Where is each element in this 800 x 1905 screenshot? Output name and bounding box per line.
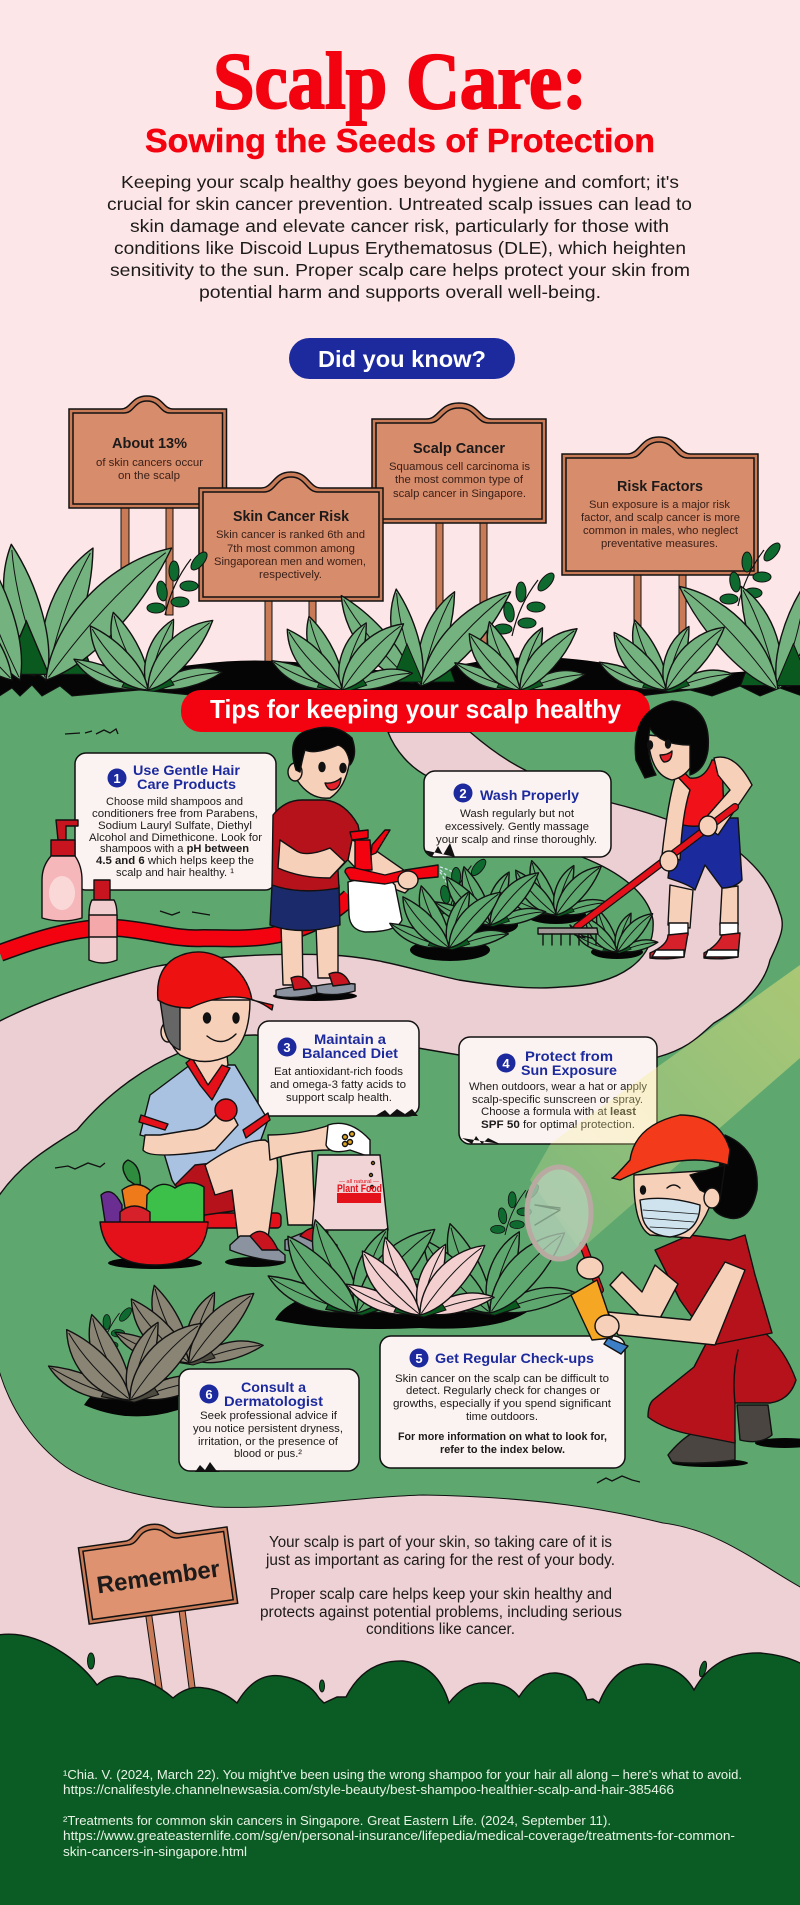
sign: about 13%: of skin cancers occur: [96, 457, 203, 469]
remember text: protects against potential problems, including serious: [260, 1604, 622, 1621]
tip 5 card: Skin cancer on the scalp can be difficult to: [395, 1373, 609, 1385]
tip 5 card: growths, especially if you spend significant: [393, 1398, 612, 1410]
sign: skin cancer risk: [199, 472, 383, 670]
remember sign: [77, 1514, 238, 1695]
lower pink ground: [0, 1340, 800, 1740]
sign: about 13%: [69, 396, 226, 615]
sign: scalp cancer: Squamous cell carcinoma is: [389, 461, 531, 473]
tip 3 card: [258, 1021, 419, 1116]
green lawn: [0, 685, 800, 1588]
character: boy watering: [270, 727, 438, 1001]
sign: skin cancer risk: Skin Cancer Risk: [233, 508, 350, 525]
remember text: conditions like cancer.: [366, 1621, 515, 1638]
tip 4 card: When outdoors, wear a hat or apply: [469, 1081, 647, 1093]
tip 4 card: Protect from: [525, 1048, 613, 1064]
tip 1 card: shampoos with a pH between: [100, 843, 249, 855]
tip 4 card: Sun Exposure: [521, 1062, 617, 1078]
tip 4 card: Choose a formula with at least: [481, 1106, 636, 1118]
sign: risk factors: common in males, who neglect: [583, 525, 738, 537]
tip 3 card: 3: [283, 1040, 291, 1055]
tip 1 card: conditioners free from Parabens,: [92, 808, 258, 820]
tip 2 card: 2: [459, 786, 467, 801]
did you know pill: [289, 338, 515, 379]
remember text: [260, 1534, 622, 1638]
sign: risk factors: preventative measures.: [601, 538, 718, 550]
tip 3 card: Balanced Diet: [302, 1045, 398, 1061]
garden plants row: [0, 528, 800, 700]
grey wilted plants: [44, 1281, 265, 1416]
tip 5 card: For more information on what to look for,: [398, 1431, 607, 1443]
character: older man planting seeds: — all natural —: [339, 1179, 379, 1185]
character: older man planting seeds: [139, 952, 388, 1267]
tip 4 card: scalp-specific sunscreen or spray.: [472, 1094, 643, 1106]
tip 3 card: Maintain a: [314, 1031, 386, 1047]
tip 5 card: [380, 1336, 625, 1468]
tip 3 card: and omega-3 fatty acids to: [270, 1079, 406, 1091]
grass tufts: [55, 729, 640, 1483]
intro paragraph: [107, 172, 692, 302]
tips heading pill: [181, 690, 650, 732]
tip 3 card: support scalp health.: [286, 1092, 392, 1104]
tip 4 card: SPF 50 for optimal protection.: [481, 1119, 635, 1131]
tip 1 card: 1: [113, 771, 121, 786]
sign: about 13%: About 13%: [112, 435, 187, 452]
tip 5 card: refer to the index below.: [440, 1444, 565, 1456]
soil band: [0, 657, 800, 702]
hedge footer: [0, 1634, 800, 1905]
intro paragraph: crucial for skin cancer prevention. Untreated scalp issues can lead to: [107, 194, 692, 214]
tip 4 card: [459, 1037, 657, 1144]
sign: skin cancer risk: Singaporean men and women,: [214, 556, 366, 568]
remember text: just as important as caring for the rest of your body.: [265, 1552, 615, 1569]
tip 6 card: you notice persistent dryness,: [193, 1423, 343, 1435]
water spray: [440, 867, 490, 925]
tip 6 card: [179, 1369, 359, 1472]
tip 2 card: your scalp and rinse thoroughly.: [436, 834, 597, 846]
intro paragraph: skin damage and elevate cancer risk, particularly for those with: [130, 216, 669, 236]
tip 5 card: Get Regular Check-ups: [435, 1350, 594, 1366]
sign: skin cancer risk: respectively.: [259, 569, 322, 581]
tip 5 card: detect. Regularly check for changes or: [406, 1385, 600, 1397]
tip 6 card: irritation, or the presence of: [198, 1436, 339, 1448]
remember text: Your scalp is part of your skin, so taking care of it is: [269, 1534, 612, 1551]
sun beam: [530, 965, 800, 1250]
sign: scalp cancer: [372, 403, 546, 660]
references: skin-cancers-in-singapore.html: [63, 1845, 247, 1859]
character: girl raking: [538, 701, 752, 959]
island plants: [386, 857, 659, 961]
tip 1 card: Alcohol and Dimethicone. Look for: [89, 832, 262, 844]
sign: risk factors: factor, and scalp cancer is more: [581, 512, 740, 524]
tip 6 card: Consult a: [241, 1379, 306, 1395]
shampoo bottles: [42, 820, 117, 963]
tip 6 card: Dermatologist: [224, 1393, 323, 1409]
tips heading pill: Tips for keeping your scalp healthy: [210, 694, 622, 724]
did you know pill: Did you know?: [318, 346, 486, 372]
tip 2 card: excessively. Gently massage: [445, 821, 589, 833]
tip 1 card: Use Gentle Hair: [133, 762, 241, 778]
tip 1 card: [75, 753, 276, 890]
references: ¹Chia. V. (2024, March 22). You might've been using the wrong shampoo for your hair all along – here's what to avoid.: [63, 1768, 742, 1782]
intro paragraph: Keeping your scalp healthy goes beyond hygiene and comfort; it's: [121, 172, 679, 192]
pink garden path: [0, 732, 782, 1197]
tip 1 card: Care Products: [137, 776, 236, 792]
intro paragraph: conditions like Discoid Lupus Erythematosus (DLE), which heighten: [114, 238, 686, 258]
tip 4 card: 4: [502, 1056, 510, 1071]
sign: scalp cancer: scalp cancer in Singapore.: [393, 488, 526, 500]
remember sign: Remember: [95, 1555, 222, 1599]
tip 1 card: 4.5 and 6 which helps keep the: [96, 855, 254, 867]
tip 3 card: Eat antioxidant-rich foods: [274, 1066, 403, 1078]
character: woman checking with magnifier: [527, 1115, 800, 1467]
sign: skin cancer risk: Skin cancer is ranked 6th and: [216, 529, 365, 541]
sign: risk factors: [562, 437, 758, 642]
intro paragraph: sensitivity to the sun. Proper scalp care helps protect your skin from: [110, 260, 690, 280]
hose: [0, 897, 350, 953]
references: ²Treatments for common skin cancers in Singapore. Great Eastern Life. (2024, September 11).: [63, 1814, 611, 1828]
tip 2 card: Wash regularly but not: [460, 808, 575, 820]
title: Scalp Care:: [213, 38, 587, 126]
references: https://cnalifestyle.channelnewsasia.com/style-beauty/best-shampoo-healthier-scalp-and-hair-385466: [63, 1783, 674, 1797]
sign: risk factors: Risk Factors: [617, 478, 703, 495]
bowl of vegetables: [100, 1160, 208, 1269]
tip 6 card: blood or pus.²: [234, 1448, 302, 1460]
tip 1 card: scalp and hair healthy. ¹: [116, 867, 234, 879]
character: older man planting seeds: Plant Food: [337, 1183, 382, 1195]
references: [63, 1768, 742, 1859]
tip 5 card: time outdoors.: [466, 1411, 538, 1423]
center flower bed: [263, 1182, 577, 1329]
tip 6 card: 6: [205, 1387, 213, 1402]
sign: scalp cancer: Scalp Cancer: [413, 440, 505, 457]
tip 2 card: [424, 771, 611, 857]
sign: about 13%: on the scalp: [118, 470, 180, 482]
intro paragraph: potential harm and supports overall well-being.: [199, 282, 601, 302]
tip 1 card: Sodium Lauryl Sulfate, Diethyl: [98, 820, 252, 832]
sign: scalp cancer: the most common type of: [395, 474, 524, 486]
sign: risk factors: Sun exposure is a major risk: [589, 499, 731, 511]
remember text: Proper scalp care helps keep your skin healthy and: [270, 1586, 612, 1603]
references: https://www.greateasternlife.com/sg/en/personal-insurance/lifepedia/medical-coverage/treatments-for-common-: [63, 1829, 735, 1843]
sign: skin cancer risk: 7th most common among: [227, 543, 355, 555]
subtitle: Sowing the Seeds of Protection: [145, 122, 655, 159]
tip 6 card: Seek professional advice if: [200, 1410, 338, 1422]
tip 2 card: Wash Properly: [480, 787, 579, 803]
tip 5 card: 5: [415, 1351, 423, 1366]
tip 1 card: Choose mild shampoos and: [106, 796, 243, 808]
